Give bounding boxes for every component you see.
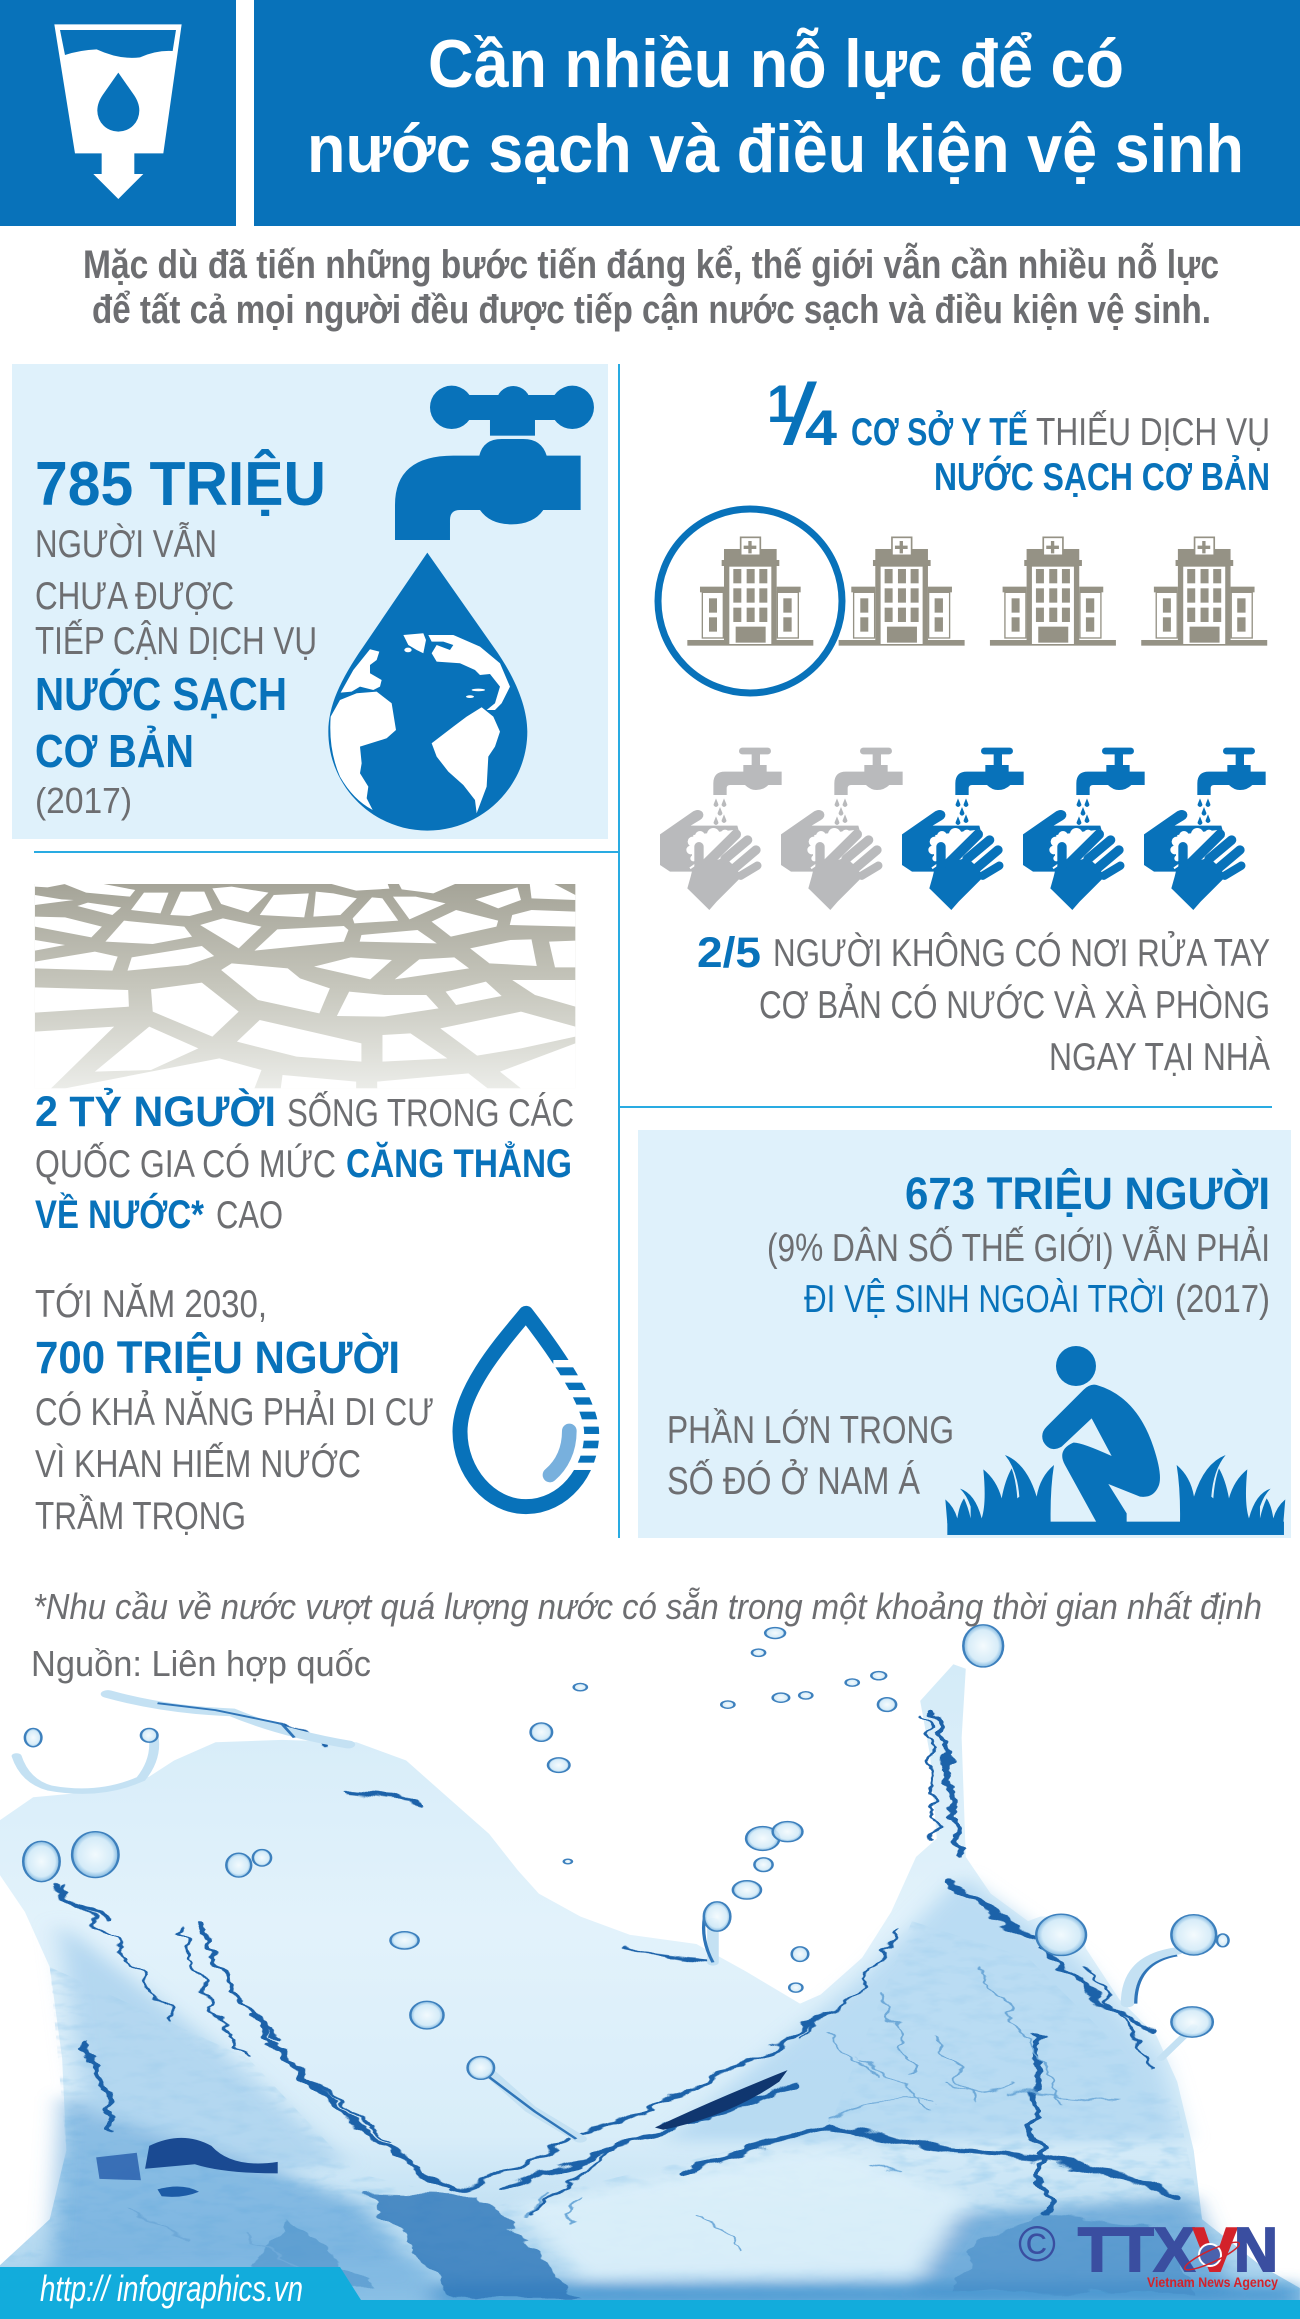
stat: 700 million people: VÌ KHAN HIẾM NƯỚC [35,1442,361,1486]
panel: two fifths without handwashing [660,748,1270,1079]
note: south asia [667,1408,954,1503]
thin spouts [17,1694,1194,2139]
description [767,1225,1270,1321]
icon: water glass with arrow [54,24,182,199]
text block: 2/5 [697,929,761,977]
text block [697,929,1270,1079]
panel: water stress [35,884,600,1538]
stat: 673 million: 673 TRIỆU NGƯỜI [905,1168,1270,1219]
heading: 1/4 fraction: 4 [805,400,837,456]
deep wedge [50,1710,1194,2297]
description text [35,522,317,821]
stat: 700 million people [35,1283,434,1538]
logo: TTXVN Vietnam News Agency [1018,2216,1278,2290]
icon: striped water drop [460,1313,600,1507]
description text: (2017) [35,780,132,821]
title: Cần nhiều nỗ lực để có [428,26,1124,102]
stat: 700 million people: 700 TRIỆU NGƯỜI [35,1332,400,1383]
stat: 2 billion people: CAO [216,1194,283,1237]
description: (2017) [1175,1278,1270,1321]
intro text [83,241,1219,332]
stat: 2 billion people: CĂNG THẲNG [346,1139,572,1186]
title [307,26,1244,187]
stat: 2 billion people [35,1087,574,1237]
illustration: cracked ground [35,884,575,1088]
logo: TTXVN Vietnam News Agency: V [1193,2216,1237,2285]
stat: 700 million people: TRẦM TRỌNG [35,1494,246,1538]
heading: 1/4 fraction: 1 [767,375,795,434]
url: http:// infographics.vn [40,2268,303,2309]
description text: NƯỚC SẠCH [35,668,287,720]
stat: 2 billion people: QUỐC GIA CÓ MỨC [35,1141,336,1186]
title: nước sạch và điều kiện vệ sinh [307,111,1244,187]
icon: squatting person in grass [945,1346,1285,1535]
note: south asia: PHẦN LỚN TRONG [667,1408,954,1452]
stat: 2 billion people: 2 TỶ NGƯỜI [35,1087,276,1136]
description: ĐI VỆ SINH NGOÀI TRỜI [804,1278,1165,1321]
description text: NGƯỜI VẪN [35,522,217,566]
stat: 700 million people: CÓ KHẢ NĂNG PHẢI DI CƯ [35,1390,434,1434]
source: Nguồn: Liên hợp quốc [31,1643,371,1684]
stat: 700 million people: TỚI NĂM 2030, [35,1283,267,1326]
header: icon panel [0,0,236,226]
stat: 2 billion people: VỀ NƯỚC* [35,1191,204,1237]
footer band with url [0,2267,1300,2319]
logo: TTXVN Vietnam News Agency: N [1234,2216,1278,2285]
description text: TIẾP CẬN DỊCH VỤ [35,619,317,663]
icons: four hospitals [687,537,1267,646]
panel: 673 million open defecation [638,1130,1291,1538]
highlight circle [658,509,842,693]
icon: globe water drop [328,553,527,831]
stat: 2 billion people: SỐNG TRONG CÁC [287,1090,574,1135]
note: south asia: SỐ ĐÓ Ở NAM Á [667,1458,920,1503]
panel: one quarter of health facilities [658,367,1270,693]
heading text [851,410,1270,499]
icons: five handwashing [660,748,1266,910]
panel: 785 million without basic water [12,364,608,839]
droplets [23,1625,1229,2079]
description text: CHƯA ĐƯỢC [35,575,234,618]
logo: TTXVN Vietnam News Agency: TTX [1078,2216,1195,2285]
heading text: CƠ SỞ Y TẾ [851,410,1028,454]
divider lines [34,364,1272,1538]
stat: 785 triệu: 785 TRIỆU [35,450,326,519]
logo: TTXVN Vietnam News Agency: Vietnam News Agency [1147,2274,1278,2290]
icon: water tap [395,386,594,540]
heading: 1/4 fraction [767,367,837,463]
header: title panel [254,0,1300,226]
description text: CƠ BẢN [35,725,194,777]
dark streaks [50,1710,1177,2279]
water splash background photo [0,1625,1300,2319]
heading: 1/4 fraction: / [783,367,817,463]
logo: TTXVN Vietnam News Agency: © [1018,2216,1056,2272]
soft tones [25,1875,1300,2306]
